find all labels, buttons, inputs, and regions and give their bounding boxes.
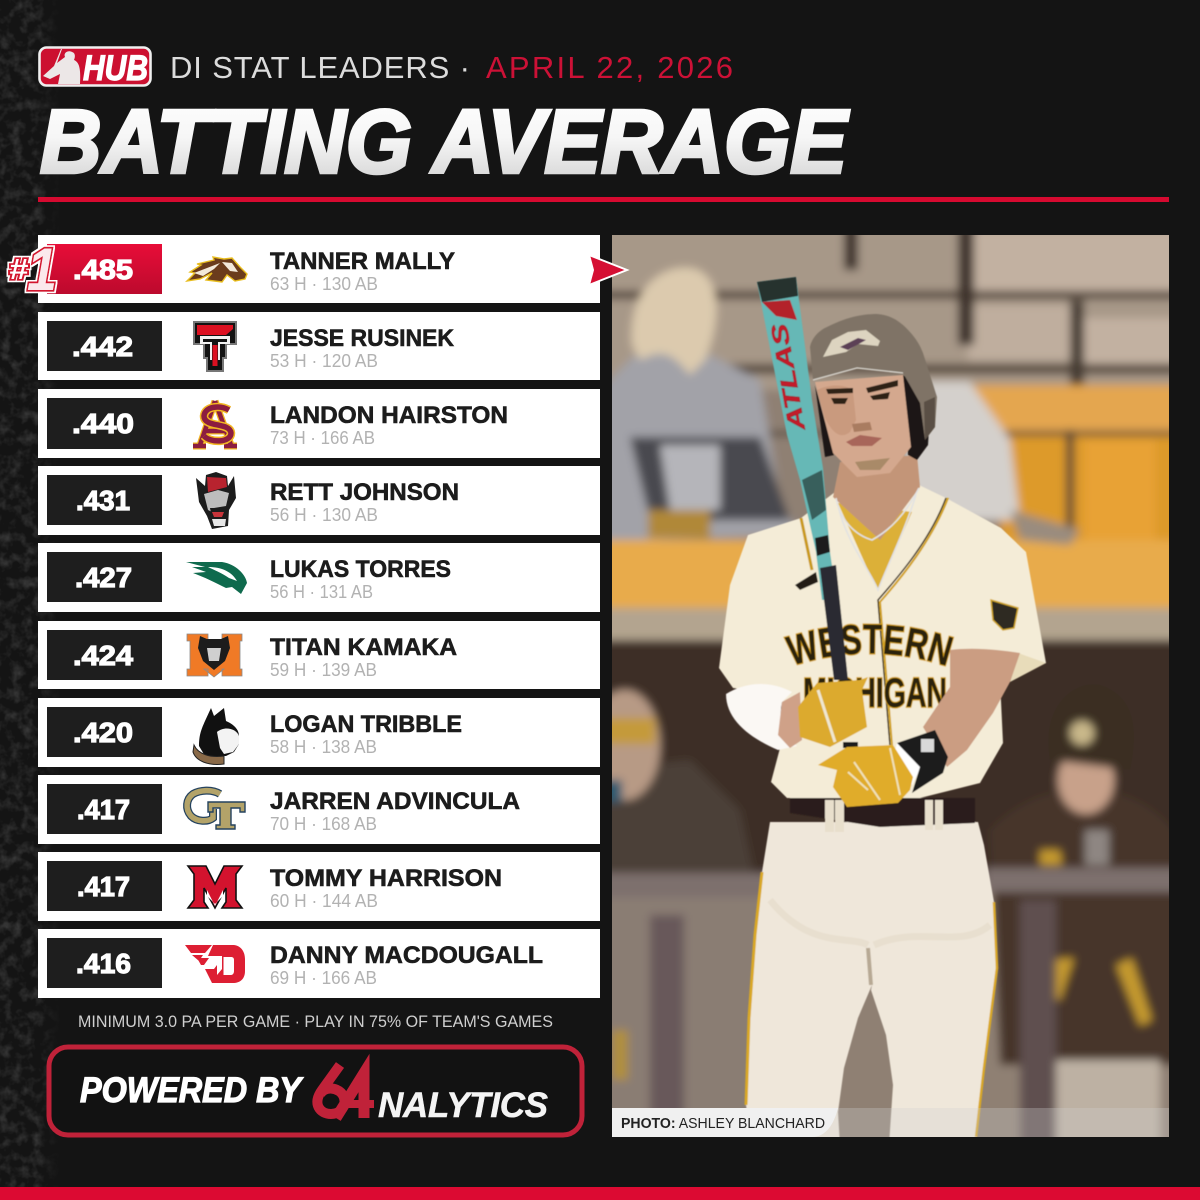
value 7: .420	[73, 717, 133, 748]
stat box 7	[47, 707, 162, 757]
nose	[852, 422, 872, 432]
white undersleeve at wrist	[895, 743, 921, 785]
face	[815, 375, 911, 477]
left dugout figure	[612, 760, 753, 871]
icon: Georgia Tech GT	[187, 791, 245, 829]
icon: Texas Tech double T	[193, 321, 237, 372]
pants	[746, 822, 997, 1145]
jersey trim	[878, 498, 946, 745]
row 4: Rett Johnson	[38, 466, 600, 535]
title: BATTING AVERAGE	[40, 92, 850, 192]
name 10: DANNY MACDOUGALL	[270, 942, 543, 969]
bat	[757, 277, 858, 748]
row 2: Jesse Rusinek	[38, 312, 600, 380]
row 3: Landon Hairston	[38, 389, 600, 458]
value 3: .440	[72, 408, 134, 439]
right coach	[990, 790, 1180, 1065]
row 1: Tanner Mally	[38, 235, 600, 303]
bat label: ATLAS	[766, 321, 810, 434]
jersey	[719, 485, 1046, 798]
belt	[790, 798, 975, 827]
jersey lettering: MICHIGAN	[803, 669, 947, 716]
player figure	[718, 276, 1047, 1137]
stats 9: 60 H · 144 AB	[270, 891, 378, 911]
arrow pointer	[589, 255, 627, 285]
name 8: JARREN ADVINCULA	[270, 788, 520, 815]
name 3: LANDON HAIRSTON	[270, 402, 508, 429]
neck	[833, 455, 920, 540]
row 10: Danny Macdougall	[38, 929, 600, 998]
helmet	[810, 314, 937, 440]
icon: Mercer bear M	[187, 634, 242, 677]
row 7: Logan Tribble	[38, 698, 600, 767]
wristband	[897, 730, 948, 793]
value 8: .417	[77, 794, 130, 825]
value 1: .485	[73, 254, 133, 285]
stats 8: 70 H · 168 AB	[270, 814, 377, 834]
photo background: blurred stands	[590, 225, 1185, 1150]
helmet logo	[823, 330, 880, 357]
value 9: .417	[77, 871, 130, 902]
stat box 9	[47, 861, 162, 911]
value 5: .427	[75, 562, 132, 593]
jersey lettering: WESTERN	[782, 622, 955, 668]
row 6: Titan Kamaka	[38, 621, 600, 689]
nalytics: NALYTICS	[378, 1086, 548, 1125]
#1 rank badge: 1	[27, 236, 57, 303]
value 10: .416	[76, 948, 131, 979]
value 6: .424	[73, 640, 133, 671]
name 9: TOMMY HARRISON	[270, 865, 502, 892]
bottom glove	[818, 745, 913, 807]
qualification note: MINIMUM 3.0 PA PER GAME · PLAY IN 75% OF TEAM'S GAMES	[78, 1012, 553, 1031]
stats 1: 63 H · 130 AB	[270, 274, 378, 294]
stats 7: 58 H · 138 AB	[270, 737, 377, 757]
stat box 3	[47, 398, 162, 449]
stat box 8	[47, 784, 162, 834]
undershirt	[838, 503, 912, 590]
value 2: .442	[72, 331, 133, 362]
brows and eyes	[826, 380, 898, 404]
row 5: Lukas Torres	[38, 543, 600, 612]
photo panel	[612, 235, 1169, 1137]
right sleeve flap	[1010, 653, 1046, 682]
stats 6: 59 H · 139 AB	[270, 660, 377, 680]
row 8: Jarren Advincula	[38, 775, 600, 844]
stat box 4	[47, 475, 162, 525]
stats 3: 73 H · 166 AB	[270, 428, 375, 448]
stat box 1	[47, 244, 162, 294]
name 1: TANNER MALLY	[270, 248, 455, 275]
name 4: RETT JOHNSON	[270, 479, 459, 506]
photo credit: PHOTO: ASHLEY BLANCHARD	[621, 1116, 825, 1132]
spectator in white	[905, 382, 1020, 520]
icon: Dayton flyers D	[185, 945, 245, 983]
shoulder patch	[991, 600, 1018, 630]
leaderboard list	[38, 235, 600, 998]
stat box 10	[47, 938, 162, 988]
#1 rank badge	[9, 236, 57, 303]
name 2: JESSE RUSINEK	[270, 325, 455, 352]
name 6: TITAN KAMAKA	[270, 634, 457, 661]
stats 4: 56 H · 130 AB	[270, 505, 378, 525]
stat box 5	[47, 552, 162, 602]
sponsor box	[49, 1047, 582, 1135]
divider	[38, 197, 1169, 202]
64 mark	[317, 1065, 374, 1118]
stats 2: 53 H · 120 AB	[270, 351, 378, 371]
right forearm	[923, 649, 1020, 767]
icon: Arizona State ASU	[193, 401, 237, 446]
icon: Wofford terrier	[193, 708, 239, 764]
mouth	[846, 435, 882, 446]
necklace	[836, 488, 919, 590]
caption tab	[612, 1108, 838, 1137]
stats 10: 69 H · 166 AB	[270, 968, 377, 988]
powered by: POWERED BY	[80, 1071, 303, 1110]
top glove	[798, 677, 868, 747]
icon: Wagner seahawk	[186, 562, 247, 594]
icon: NC State wolf	[196, 472, 236, 529]
subtitle: DI STAT LEADERS ·	[170, 50, 470, 85]
left arm sleeve	[726, 684, 797, 750]
bottom band	[0, 1187, 1200, 1200]
hair and ear flap	[815, 375, 931, 460]
stat box 6	[47, 630, 162, 680]
icon: Western Michigan bronco	[187, 257, 247, 282]
value 4: .431	[76, 485, 130, 516]
name 5: LUKAS TORRES	[270, 556, 451, 583]
photo caption bar	[612, 1108, 1169, 1137]
icon: HUB logo	[40, 48, 150, 88]
blonde spectator	[600, 345, 800, 540]
#1 rank badge: #	[9, 254, 29, 286]
name 7: LOGAN TRIBBLE	[270, 711, 462, 738]
jersey lettering	[782, 622, 955, 710]
stats 5: 56 H · 131 AB	[270, 582, 373, 602]
dugout rail and lower wall	[600, 873, 770, 897]
header: logo and date line	[40, 48, 733, 88]
icon: Miami M	[188, 866, 242, 908]
date: APRIL 22, 2026	[486, 50, 733, 85]
stat box 2	[47, 321, 162, 371]
icon: HUB logo: HUB	[83, 49, 148, 88]
adidas stripes	[795, 572, 818, 590]
row 9: Tommy Harrison	[38, 852, 600, 921]
